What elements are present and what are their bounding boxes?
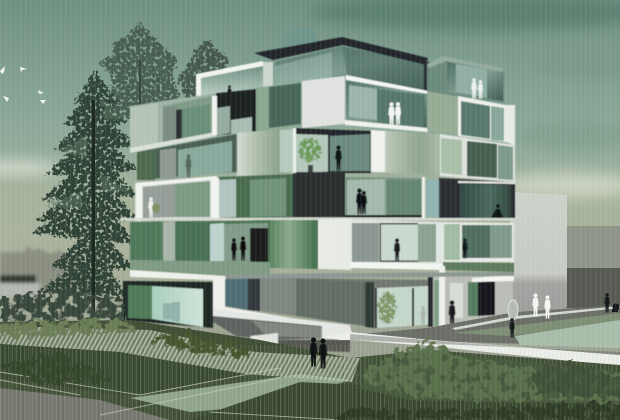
seated figure bbox=[491, 204, 503, 218]
first floor: green panel bbox=[270, 220, 318, 269]
lawn lines bbox=[0, 368, 340, 420]
plant bbox=[299, 138, 321, 172]
tree: large pine bbox=[30, 70, 138, 322]
third floor: right bbox=[371, 130, 515, 182]
fourth floor: left glass box bbox=[130, 93, 216, 153]
second floor: window with couple bbox=[345, 177, 439, 218]
lawn bbox=[0, 320, 620, 420]
plaza bbox=[350, 293, 620, 348]
third floor: left bbox=[137, 134, 237, 180]
person with stroller bbox=[604, 293, 620, 313]
first floor: right window bbox=[443, 222, 514, 272]
upper-left terrace box bbox=[196, 61, 273, 103]
first floor: white panel bbox=[318, 218, 351, 270]
birds bbox=[0, 66, 46, 104]
second floor: black panel bbox=[293, 171, 345, 217]
runners bbox=[310, 337, 327, 368]
translucent sculpture figure bbox=[508, 300, 518, 320]
ground floor: interior bbox=[225, 277, 430, 328]
ground floor: entrance wall and door bbox=[428, 266, 514, 329]
second floor: left window row bbox=[135, 176, 219, 221]
fourth floor: corner window with white figures bbox=[345, 75, 428, 132]
tree: small rear pine bbox=[178, 40, 230, 102]
fourth floor: right panels bbox=[427, 91, 515, 145]
second floor: right dark window bbox=[120, 178, 515, 220]
fourth floor: green and white panels bbox=[256, 76, 345, 132]
second floor: green glass bbox=[219, 174, 293, 218]
white entrance wall and slab bbox=[130, 270, 352, 339]
first floor: left green glass bbox=[130, 220, 270, 276]
distant building on the right bbox=[510, 192, 620, 312]
tree: rear pine bbox=[98, 22, 180, 118]
first floor: window with figure bbox=[350, 220, 443, 270]
first floor slab bbox=[225, 272, 514, 279]
white low wall bbox=[322, 332, 620, 366]
building bbox=[120, 29, 515, 352]
front steps bbox=[213, 316, 350, 352]
fourth floor: centre dark balcony bbox=[212, 89, 256, 135]
shrubs bbox=[0, 288, 620, 420]
penthouse right bbox=[427, 56, 504, 103]
third floor: centre bbox=[237, 128, 371, 176]
distant hills and shoreline on the left bbox=[0, 246, 110, 297]
ground floor: left showcase window bbox=[123, 281, 213, 328]
chimney bbox=[280, 29, 317, 52]
penthouse: roof and glass bbox=[254, 37, 430, 92]
